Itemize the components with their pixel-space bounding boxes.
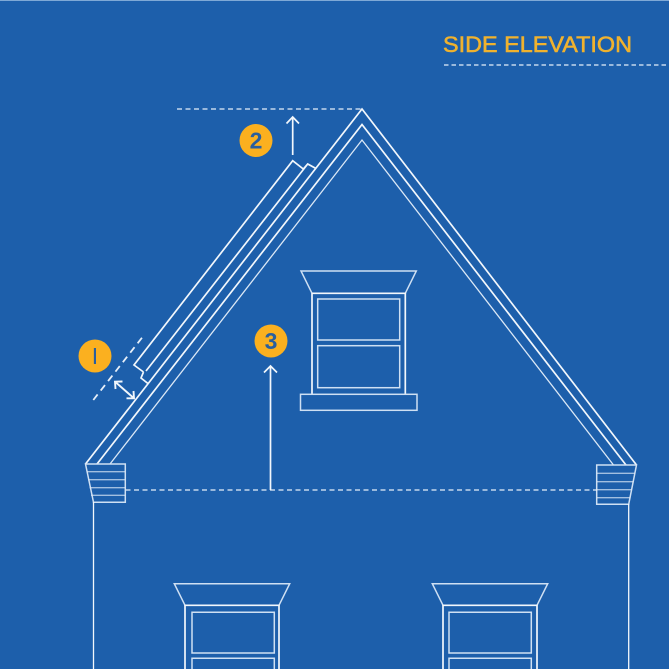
ridge level dashed line (177, 108, 362, 110)
arrow up (264, 366, 277, 490)
window sill (300, 394, 417, 410)
eaves level dashed line (126, 489, 597, 491)
dashed guide (93, 336, 143, 400)
badge 2: 2 (250, 128, 262, 154)
window frame (312, 293, 405, 394)
dimension 2: roof height increase (240, 117, 299, 157)
badge 3: 3 (265, 328, 277, 354)
double arrow (115, 382, 134, 398)
right corbel (597, 465, 636, 504)
dimension 3: loft height (254, 324, 288, 490)
arrow up (286, 117, 299, 155)
dimension 1: roof thickness (78, 336, 143, 400)
lower left window (174, 584, 290, 669)
left corbel (86, 464, 125, 502)
lower right window (432, 584, 548, 669)
house walls (94, 502, 629, 669)
roof covering layers (134, 161, 316, 383)
upper pane (318, 299, 400, 340)
roof outline (86, 109, 636, 465)
window hood (301, 271, 416, 293)
badge 3 (254, 324, 288, 358)
gable window (300, 271, 417, 410)
badge 1: I (92, 343, 98, 369)
title: SIDE ELEVATION (443, 32, 632, 57)
lower pane (318, 346, 400, 388)
